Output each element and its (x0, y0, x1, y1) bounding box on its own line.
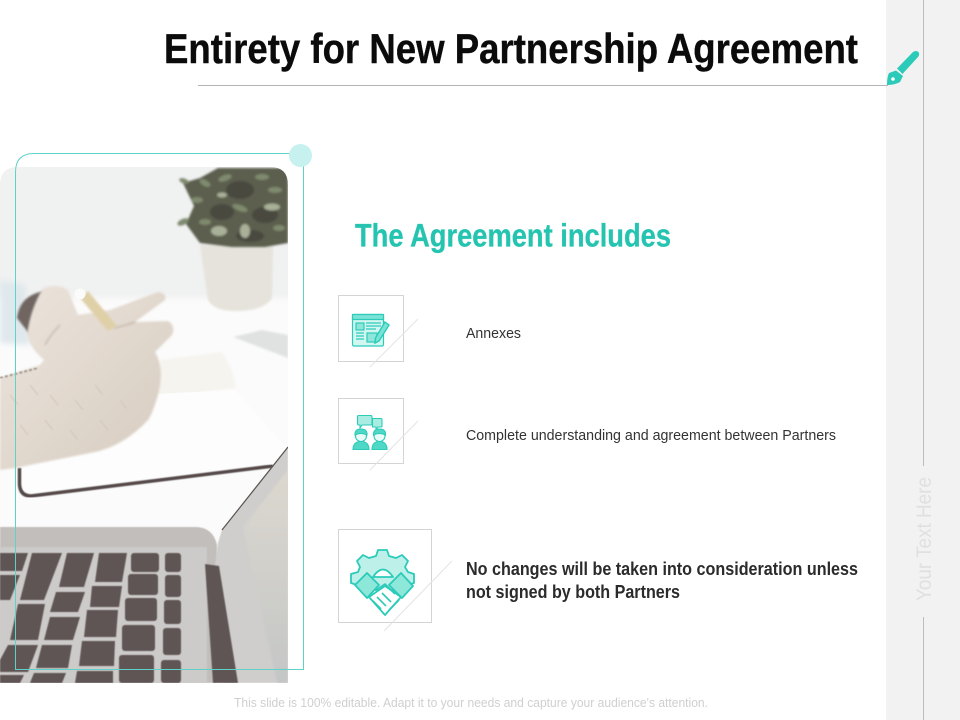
title: Entirety for New Partnership Agreement (164, 25, 858, 72)
sleeve (0, 280, 30, 345)
footer note: This slide is 100% editable. Adapt it to your needs and capture your audience's attention. (234, 696, 708, 710)
icon: gear and handshake (351, 550, 414, 615)
icon: fountain pen (887, 51, 919, 85)
hand (0, 286, 173, 470)
title underline (198, 85, 888, 86)
item 3: no changes (338, 530, 858, 631)
keyboard keys (0, 553, 181, 683)
frame corner dot (289, 144, 312, 167)
icon box 3 (338, 530, 432, 622)
right side band (886, 0, 960, 720)
plant foliage (176, 168, 288, 247)
laptop lid (215, 447, 288, 683)
open book page (160, 353, 235, 394)
no changes text: not signed by both Partners (466, 581, 680, 602)
icon: document and pen (352, 314, 389, 346)
icon box 2 (338, 398, 404, 464)
laptop hinge (205, 564, 238, 683)
teal photo frame (16, 154, 304, 670)
pen (80, 291, 117, 331)
dark fingers behind hand (16, 290, 42, 334)
no changes text: No changes will be taken into consideration unless (466, 558, 858, 579)
no changes text (466, 558, 858, 602)
icon box 1 (338, 296, 404, 362)
notebook (158, 392, 206, 398)
phone (233, 330, 288, 358)
laptop body (0, 527, 217, 683)
arm hair (10, 385, 126, 440)
annexes text: Annexes (466, 326, 521, 342)
photo: hand writing at a desk with laptop (0, 167, 300, 693)
desk surface (0, 300, 288, 544)
item 1: annexes (338, 296, 521, 367)
item 2: complete understanding (338, 398, 836, 470)
heading: The Agreement includes (355, 218, 671, 254)
understanding text: Complete understanding and agreement between Partners (466, 428, 836, 444)
plant pot (200, 245, 273, 311)
vertical side label: Your Text Here (913, 477, 936, 601)
icon: two people talking (353, 416, 387, 450)
